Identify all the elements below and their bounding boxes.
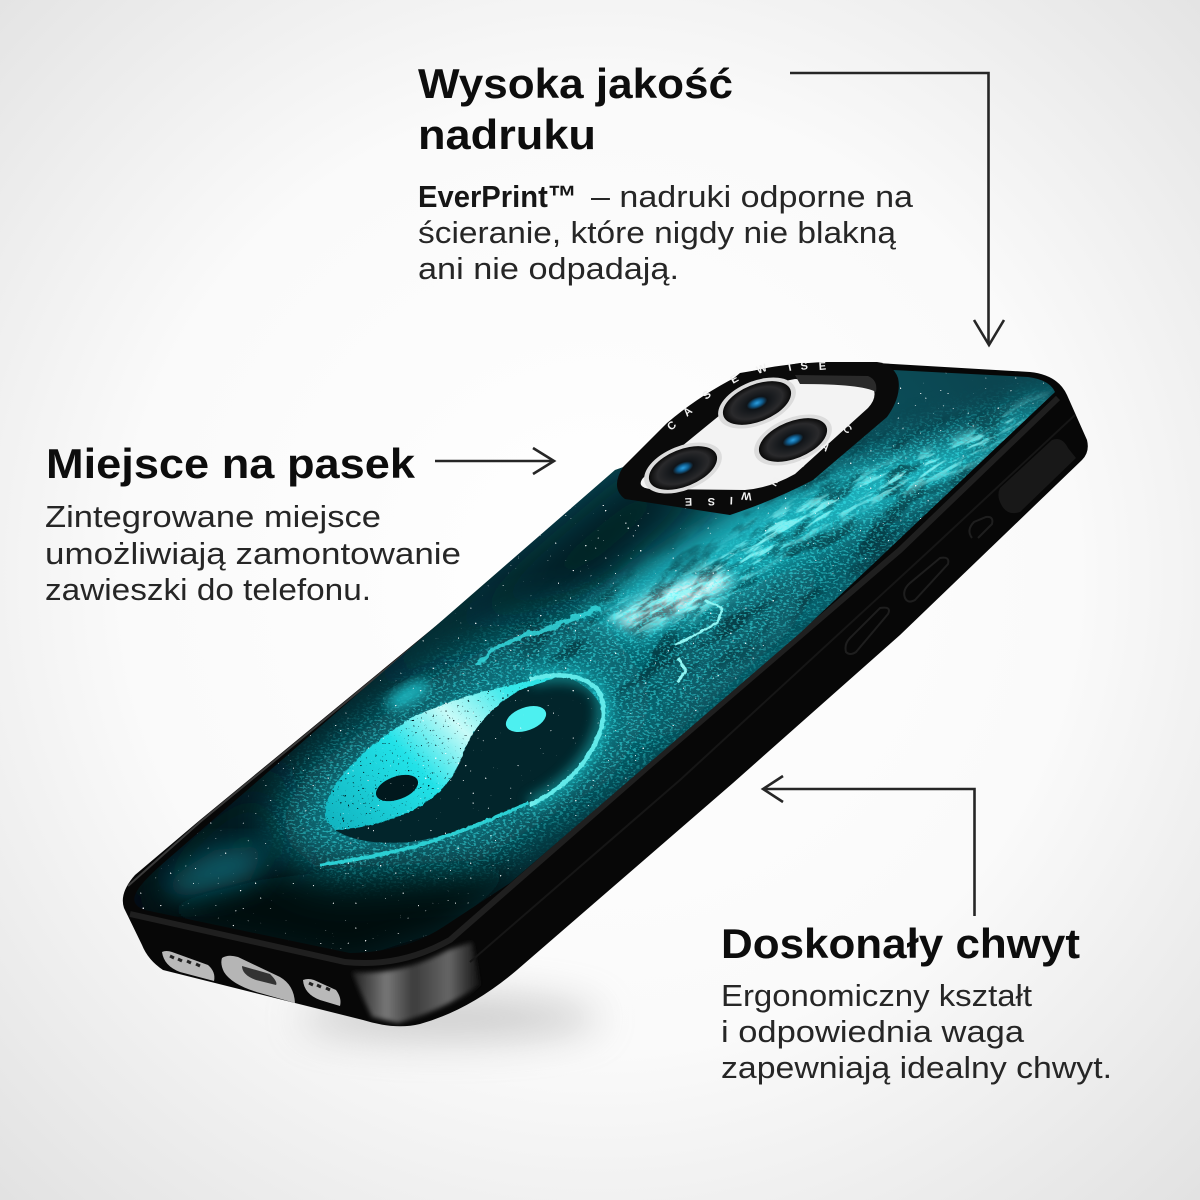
- lower swirl arm: [320, 803, 528, 865]
- brand lettering: E: [818, 361, 827, 373]
- case body: [123, 363, 1088, 1026]
- body text: zapewniają idealny chwyt.: [721, 1050, 1112, 1085]
- brand lettering: S: [708, 495, 715, 507]
- speaker left holes: [170, 956, 200, 966]
- body text: zawieszki do telefonu.: [45, 572, 371, 607]
- body text: i odpowiednia waga: [721, 1014, 1025, 1049]
- charging opening: [242, 966, 276, 985]
- body text: Zintegrowane miejsce: [45, 499, 381, 534]
- side crease line: [470, 415, 1075, 962]
- brand lettering: W: [740, 489, 752, 502]
- bottom ports: [162, 951, 340, 1006]
- rim highlight right and bottom: [130, 398, 1058, 963]
- speaker left: [162, 951, 214, 981]
- brand lettering: E: [768, 475, 781, 489]
- medium teal zone under band: [630, 532, 822, 762]
- brand lettering: S: [800, 360, 809, 373]
- dark lower area: [170, 860, 515, 950]
- body text: umożliwiają zamontowanie: [45, 536, 461, 571]
- camera island: [617, 360, 899, 515]
- brand lettering: A: [818, 440, 832, 454]
- printed back panel: [134, 370, 1055, 953]
- phone case: [122, 362, 1088, 1026]
- camera window: [641, 379, 875, 490]
- dark flecks on bright side: [326, 678, 554, 828]
- heading: Doskonały chwyt: [721, 920, 1080, 967]
- light dot: [506, 706, 546, 732]
- body text: Ergonomiczny kształt: [721, 978, 1032, 1013]
- upper swirl arm: [478, 608, 600, 665]
- brand lettering: S: [700, 388, 714, 402]
- strap slot: [998, 439, 1076, 513]
- callout: print quality: [418, 60, 1004, 345]
- body text: EverPrint™: [418, 179, 577, 214]
- brand lettering: C: [665, 419, 679, 433]
- brand lettering: [665, 360, 854, 507]
- speaker right holes: [309, 983, 330, 990]
- phone shadow: [300, 996, 600, 1040]
- dark dot: [376, 774, 418, 802]
- brand lettering: E: [728, 373, 741, 387]
- heading: Wysoka jakość: [418, 60, 733, 107]
- bright side of yin yang: [325, 675, 563, 830]
- heading: Miejsce na pasek: [46, 440, 416, 487]
- bottom corner gloss: [352, 942, 480, 1023]
- body text: [45, 499, 461, 607]
- rim glow: [530, 675, 603, 805]
- charging port: [221, 956, 295, 1003]
- side buttons: [846, 517, 992, 654]
- nebula left swirl glow: [270, 615, 660, 870]
- nebula band: [570, 392, 1060, 650]
- arrow: down to print: [790, 73, 1004, 345]
- body text: [418, 179, 914, 286]
- heading: [418, 60, 733, 158]
- dark upper-left area: [178, 467, 719, 858]
- body text: [721, 978, 1112, 1085]
- teal cloud lower-left: [165, 845, 270, 900]
- bright wisps: [675, 600, 722, 682]
- bright core of band: [612, 572, 735, 630]
- speaker right: [303, 979, 340, 1006]
- yin yang rim: [530, 675, 603, 805]
- callout: strap slot: [45, 440, 554, 607]
- brand lettering: A: [681, 405, 695, 419]
- callout: grip: [721, 776, 1112, 1085]
- lens: left: [637, 432, 729, 504]
- stars: [140, 372, 1044, 951]
- arrow: left to case side: [763, 776, 974, 916]
- brand lettering: I: [787, 362, 793, 374]
- body text: ścieranie, które nigdy nie blakną: [418, 215, 897, 250]
- lens: right: [747, 404, 839, 476]
- texture grain: [264, 388, 1049, 891]
- window top shading: [795, 375, 876, 392]
- brand lettering: S: [795, 457, 808, 471]
- brand lettering: E: [685, 495, 692, 507]
- island frame: [617, 362, 899, 515]
- brand lettering: C: [840, 422, 854, 437]
- body text: – nadruki odporne na: [591, 179, 914, 214]
- arrow: right to strap slot: [435, 448, 554, 474]
- body text: ani nie odpadają.: [418, 251, 679, 286]
- brand lettering: W: [755, 362, 769, 377]
- rim highlight left edge: [128, 482, 612, 886]
- heading: nadruku: [418, 111, 596, 158]
- cloud breakup: [512, 400, 1015, 708]
- brand lettering: I: [730, 494, 733, 506]
- bright streaks: [601, 391, 1050, 640]
- lens: top: [711, 367, 803, 439]
- dark side of yin yang: [335, 675, 603, 843]
- left glow patch: [383, 675, 433, 715]
